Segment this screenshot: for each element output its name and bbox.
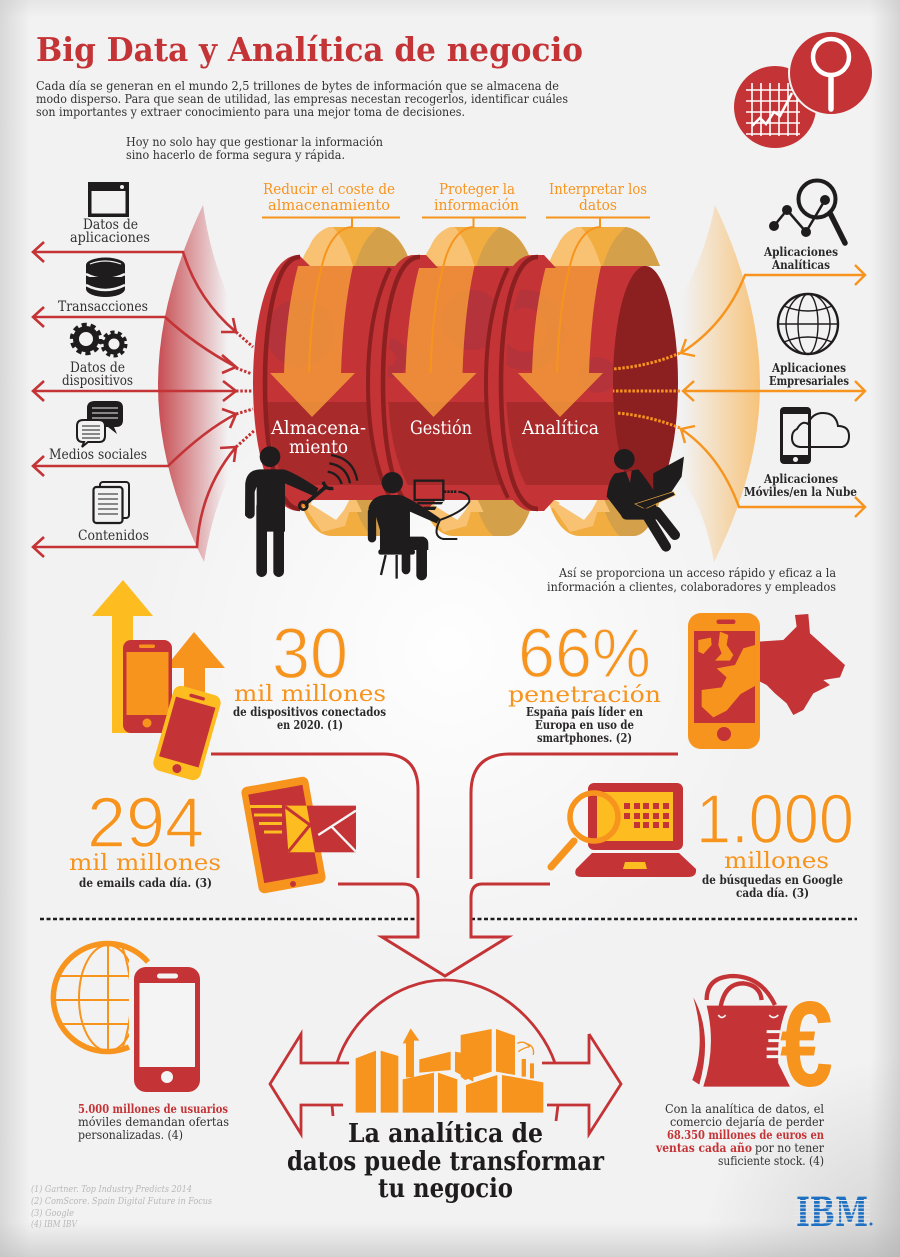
heading: conclusion: datos puede transformar	[287, 1147, 604, 1177]
label: Datos de aplicaciones: aplicaciones	[70, 230, 150, 246]
label: Aplicaciones Empresariales: Aplicaciones	[771, 361, 846, 375]
heading: Interpretar los datos	[546, 180, 650, 218]
arrow: yellow up	[92, 580, 153, 733]
label: Aplicaciones Analíticas	[763, 245, 838, 272]
stat: 30 mil millones: mil millones	[234, 682, 386, 707]
euro symbol: €	[780, 976, 833, 1112]
arrow: orange up	[165, 632, 225, 695]
icon: gears	[72, 325, 126, 356]
label: Analítica: Analítica	[521, 418, 599, 439]
stat: 30 mil millones: en 2020. (1)	[277, 718, 343, 732]
label: Medios sociales: Medios sociales	[49, 447, 147, 463]
person: technician with wrench	[245, 446, 357, 572]
heading: conclusion: La analítica de	[348, 1119, 543, 1149]
text: retail savings: por no tener	[755, 1141, 824, 1155]
stat: 30 mil millones: de dispositivos conectados	[233, 705, 386, 719]
label: Gestión: Gestión	[410, 418, 472, 439]
arrows down	[270, 217, 603, 417]
panel: left lens	[158, 205, 228, 562]
heading: Interpretar los datos: datos	[579, 196, 617, 214]
stat: 294 mil millones: 294	[87, 784, 204, 863]
title: Big Data y Analítica de negocio	[36, 30, 583, 69]
stat: 1.000 millones: 1.000	[696, 780, 854, 858]
stat: 66% penetración: smartphones. (2)	[537, 731, 632, 745]
caption: fast access: información a clientes, colaboradores y empleados	[547, 580, 836, 594]
dashed divider left	[40, 918, 418, 920]
label: Transacciones: Transacciones	[58, 299, 148, 315]
stat: 294 mil millones: mil millones	[69, 851, 221, 876]
label: Aplicaciones Analíticas: Aplicaciones	[763, 245, 838, 259]
icon: shopping bag and euro	[692, 976, 833, 1112]
dashed divider right	[471, 918, 857, 920]
stat: 294 mil millones	[69, 784, 221, 890]
intro paragraph: son importantes y extraer conocimiento para una mejor toma de decisiones.	[36, 105, 465, 119]
label: Datos de aplicaciones	[70, 217, 150, 246]
gold drum bottoms	[297, 493, 660, 536]
stat: 1.000 millones: millones	[724, 849, 829, 874]
person: operator at computer	[368, 472, 469, 579]
heading: Proteger la información: información	[434, 196, 519, 214]
label: Datos de dispositivos: dispositivos	[62, 373, 133, 389]
icon: analytics loupe	[770, 180, 845, 243]
gold drum tops	[300, 227, 660, 266]
label: Aplicaciones Móviles/en la Nube: Aplicaciones	[763, 472, 838, 486]
text: mobile users: 5.000 millones de usuarios	[78, 1102, 228, 1116]
secondary intro text	[126, 135, 383, 162]
heading: Reducir el coste: almacenamiento	[268, 196, 390, 214]
icon: database	[86, 258, 125, 297]
end cap	[613, 266, 678, 500]
icon: application window	[88, 182, 129, 217]
text: mobile users: personalizadas. (4)	[78, 1128, 183, 1142]
text: retail savings	[655, 1102, 824, 1168]
label: Datos de dispositivos: Datos de	[70, 360, 125, 376]
references	[31, 1184, 212, 1230]
heading: conclusion: tu negocio	[378, 1174, 513, 1204]
label: Aplicaciones Empresariales	[769, 361, 849, 388]
icon: city buildings	[356, 1028, 543, 1113]
map: Europe inside phone	[698, 632, 755, 717]
stat: 66% penetración: penetración	[508, 683, 661, 708]
icon: documents	[94, 482, 129, 523]
intro paragraph	[36, 79, 568, 119]
magnifier	[551, 793, 618, 867]
stat: 294 mil millones: de emails cada día. (3)	[79, 876, 212, 890]
intro paragraph: modo disperso. Para que sean de utilidad, las empresas necestan recogerlos, identificar cuáles	[36, 92, 568, 106]
cylinder body	[260, 266, 650, 500]
text: retail savings: Con la analítica de datos, el	[665, 1102, 824, 1116]
logo: IBM: IBM	[796, 1189, 868, 1236]
heading: Interpretar los datos: Interpretar los	[549, 180, 647, 198]
icon: envelope	[285, 806, 356, 852]
heading: Reducir el coste: Reducir el coste de	[263, 180, 395, 198]
stat: 1.000 millones: de búsquedas en Google	[702, 873, 843, 887]
secondary intro text: Hoy no solo hay que gestionar la información	[126, 135, 383, 149]
phone: yellow	[151, 684, 223, 782]
icon: phone and cloud	[780, 407, 849, 464]
panel: data cylinder	[253, 217, 678, 536]
stat: 66% penetración: Europa en uso de	[535, 718, 634, 732]
label: Aplicaciones Empresariales: Empresariales	[769, 374, 849, 388]
icon: phone with Europe map	[688, 613, 845, 749]
icon: globe	[778, 294, 838, 354]
icon: magnifier and chart circles	[734, 31, 873, 148]
caption: fast access	[547, 566, 836, 594]
stat: 1.000 millones: cada día. (3)	[736, 886, 809, 900]
label: Aplicaciones Móviles/en la Nube: Móviles/en la Nube	[744, 485, 857, 499]
text: retail savings: 68.350 millones de euros en	[667, 1128, 824, 1142]
label: Almacenamiento: miento	[289, 437, 348, 458]
stat: 30 mil millones	[233, 615, 386, 732]
label: Almacenamiento: Almacena-	[270, 418, 366, 439]
panel: right lens	[682, 205, 760, 562]
text: retail savings: ventas cada año	[655, 1141, 752, 1155]
label: Aplicaciones Analíticas: Analíticas	[771, 258, 830, 272]
label: Contenidos: Contenidos	[78, 528, 149, 544]
text: mobile users	[78, 1102, 229, 1142]
heading: conclusion	[287, 1119, 604, 1204]
text: retail savings: comercio dejaría de perder	[670, 1115, 824, 1129]
icon: globe and phone	[53, 944, 200, 1092]
stat: 66% penetración: España país líder en	[526, 705, 643, 719]
icon: tablet with email	[240, 776, 356, 894]
map: Europe outside phone	[758, 614, 845, 715]
stat: 66% penetración: 66%	[518, 614, 651, 692]
secondary intro text: sino hacerlo de forma segura y rápida.	[126, 148, 345, 162]
person: seated with laptop	[607, 449, 684, 547]
stat: 30 mil millones: 30	[272, 615, 348, 694]
ring details	[265, 255, 556, 511]
stat: 66% penetración	[508, 614, 661, 745]
heading: Proteger la información: Proteger la	[439, 180, 515, 198]
icon: phones with growth arrows	[92, 580, 225, 782]
label: Almacenamiento	[270, 418, 366, 458]
arrow: left transformation arrow and dome	[270, 980, 621, 1134]
icon: speech bubbles	[77, 401, 123, 447]
icon: laptop search	[551, 783, 696, 877]
caption: fast access: Así se proporciona un acceso rápido y eficaz a la	[558, 566, 836, 580]
references: (2) ComScore. Spain Digital Future in Focus	[31, 1196, 212, 1207]
key grid	[624, 803, 669, 828]
label: Datos de dispositivos	[62, 360, 133, 389]
references: (1) Gartner. Top Industry Predicts 2014	[31, 1184, 192, 1195]
heading: Proteger la información	[422, 180, 526, 218]
label: Datos de aplicaciones: Datos de	[83, 217, 138, 233]
phone: red	[123, 640, 172, 733]
intro paragraph: Cada día se generan en el mundo 2,5 trillones de bytes de información que se almacena de	[36, 79, 559, 93]
first ring	[253, 255, 310, 511]
arrow: connectors into central arrow	[211, 754, 678, 976]
arrows: right data flows	[613, 265, 865, 517]
text: retail savings: suficiente stock. (4)	[718, 1154, 824, 1168]
references: (3) Google	[31, 1208, 74, 1219]
text: mobile users: móviles demandan ofertas	[78, 1115, 229, 1129]
label: Aplicaciones Móviles/en la Nube	[744, 472, 857, 499]
arrows: left data flows	[33, 242, 255, 557]
stat: 1.000 millones	[696, 780, 854, 900]
references: (4) IBM IBV	[31, 1219, 78, 1230]
heading: Reducir el coste	[262, 180, 400, 218]
